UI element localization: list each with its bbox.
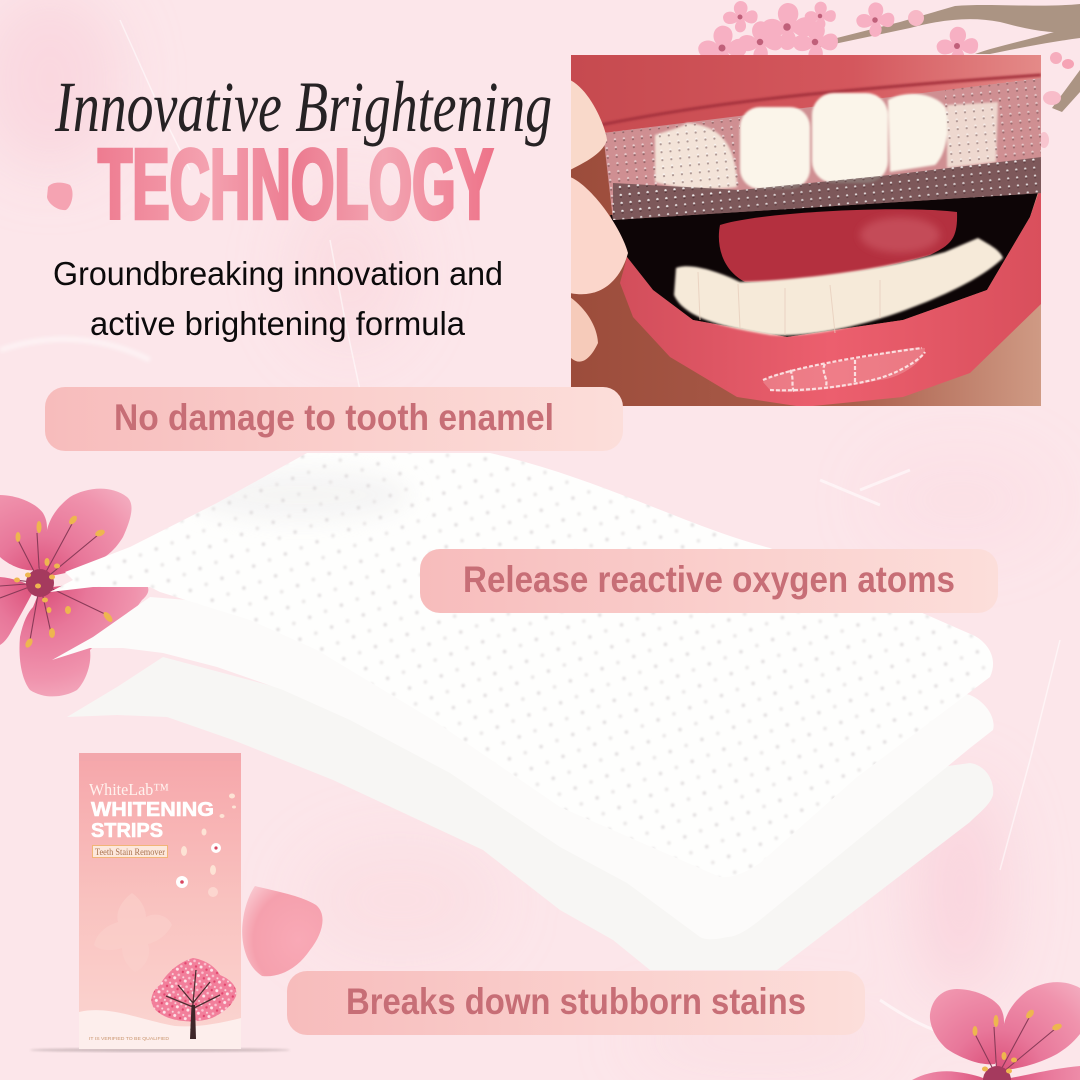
petal: large near box: [242, 886, 323, 976]
subtitle text: Groundbreaking innovation and: [53, 255, 503, 292]
pill: Breaks down stubborn stains: Breaks down stubborn stains: [346, 981, 806, 1022]
strips: stacked whitening strips: [50, 440, 1010, 970]
mouth opening: [610, 180, 1042, 337]
photo: mouth with whitening strips: [570, 55, 1042, 407]
flower: bottom right blossom: [912, 982, 1080, 1080]
strip: middle sheet: [52, 597, 994, 939]
strip: bubble texture bands: [603, 118, 740, 220]
product box: [30, 753, 290, 1052]
title: TECHNOLOGY: TECHNOLOGY: [98, 129, 493, 239]
strip: top sheet: [50, 453, 993, 877]
pill: Release reactive oxygen atoms: Release reactive oxygen atoms: [463, 559, 955, 600]
pill: No damage to tooth enamel: [45, 387, 623, 451]
decoration: cherry branch with blossoms: [698, 1, 1080, 148]
subtitle text: active brightening formula: [90, 305, 466, 342]
product box: STRIPS: [91, 820, 163, 842]
box: tag: Teeth Stain Remover: [95, 847, 165, 857]
flower: left blossom: [0, 489, 148, 696]
strip base: [603, 78, 1042, 220]
subtitle text: [53, 255, 503, 342]
lower teeth: [674, 238, 1003, 335]
lower lip: [620, 183, 1042, 407]
box: footer text: IT IS VERIFIED TO BE QUALIFIED: [89, 1036, 170, 1041]
pill: No damage to tooth enamel: No damage to tooth enamel: [114, 397, 554, 438]
box: small blossoms: [176, 794, 236, 897]
title: Innovative Brightening: Innovative Brightening: [54, 67, 552, 147]
petal: small floating: [47, 183, 73, 210]
strip: lower band: [613, 157, 1042, 220]
strip: bottom sheet: [67, 657, 993, 970]
box: pale flower: [94, 893, 172, 972]
upper lip: [571, 55, 1041, 140]
fingers: [570, 80, 607, 170]
strip: dot texture and shading: [50, 440, 1010, 890]
pill: Release reactive oxygen atoms: [420, 549, 998, 613]
box: brand text: WhiteLab™: [89, 780, 169, 799]
tongue: [719, 209, 957, 282]
product box: WHITENING: [91, 799, 214, 821]
box: cherry tree: [151, 958, 236, 1039]
upper teeth: [655, 93, 998, 189]
pill: Breaks down stubborn stains: [287, 971, 865, 1035]
